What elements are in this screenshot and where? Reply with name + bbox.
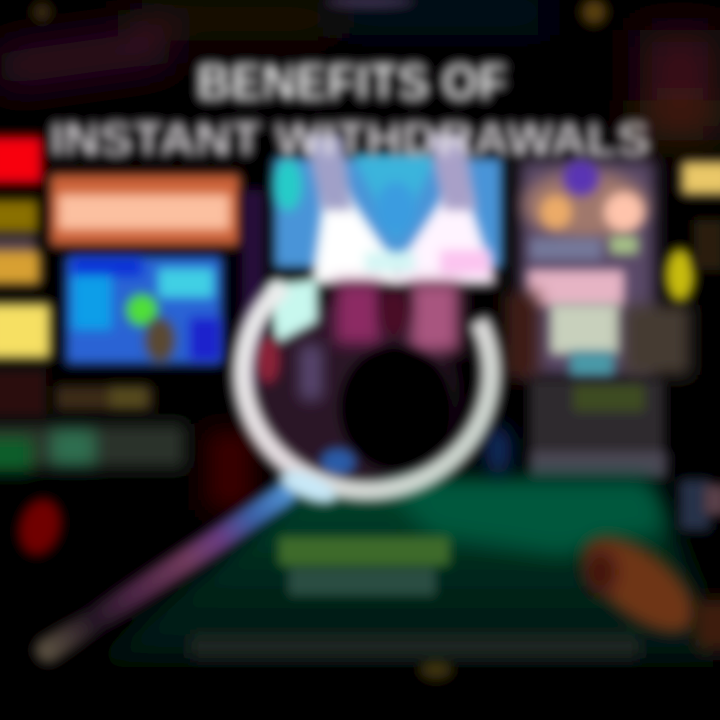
panel: right yellow lights [666,162,720,301]
panel: right machine base [530,380,720,478]
panel: centre screen [274,135,502,284]
panel: green table [100,478,720,679]
bottom vignette [0,690,720,720]
left wall signs [0,137,50,416]
panel: left green table [0,424,185,472]
panel: blue screen [66,256,222,364]
icon: magnifier ring [243,285,491,509]
red chip blur [13,495,67,559]
title: BENEFITS OF [197,54,507,110]
title: INSTANT WITHDRAWALS [50,113,650,165]
hand at table [568,519,720,651]
dark red reflection beside lens [205,430,255,510]
title [50,54,650,165]
icon: magnifier lens interior [255,278,512,480]
panel: lower left machine base [56,386,152,410]
panel: purple column beside banner [242,190,264,390]
panel: orange banner [50,174,240,246]
panel: green table label [278,536,450,596]
panel: right screen [505,160,690,378]
icon: magnifier handle [48,494,285,650]
